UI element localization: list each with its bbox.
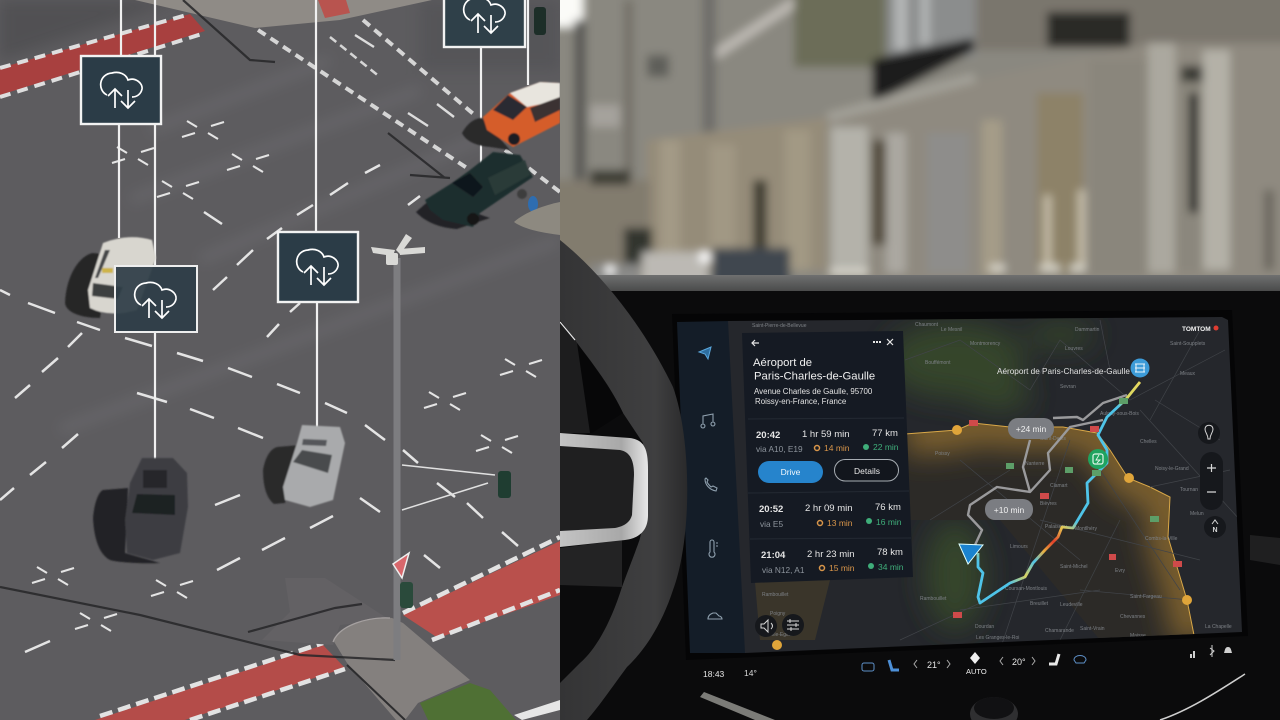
map place labels: Nanterre [1025,461,1045,467]
map place labels: La Chapelle [1205,624,1232,630]
route 1: 1 hr 59 min [802,429,850,440]
map place labels: Coursan-Montlouis [1005,586,1047,592]
clock: 18:43 [703,669,725,679]
route 1 [756,428,899,454]
lamp pole [394,258,400,660]
car: taxi [65,237,156,318]
map place labels: Chelles [1140,439,1157,445]
auto label: AUTO [966,667,987,676]
map place labels: Chaumont [915,322,939,328]
map place labels: Saint-Fargeau [1130,594,1162,600]
destination label: Aéroport de Paris-Charles-de-Gaulle [997,367,1130,376]
screen bezel [672,310,1248,660]
passenger temperature: 20° [1012,657,1026,667]
route pill +10 [985,499,1033,520]
map place labels: Chamarande [1045,628,1074,634]
route 2: 2 hr 09 min [805,503,853,514]
screen sidebar [677,321,746,653]
data box 3 [278,232,358,302]
chevrons right [1000,657,1035,665]
heat region [900,420,1200,645]
map place labels: Noisy-le-Grand [1155,466,1189,472]
map place labels: Saint-Michel [1060,564,1088,570]
climate bar [703,645,1232,679]
route 1: 22 min [873,442,899,452]
driver temperature: 21° [927,660,941,670]
blurred building background [540,0,1280,295]
asphalt tonal bands [2,2,141,52]
destination pin [1130,358,1150,378]
route 2: via E5 [760,519,783,529]
data box 1 [81,56,161,124]
center console knob [970,697,1018,720]
map place labels: Sevran [1060,384,1076,390]
car: dark jeep [93,458,188,563]
lower heat sliver [755,580,830,640]
hub highlight line [560,322,575,340]
map control: north [1204,516,1226,538]
details button [834,460,898,481]
route 2 [759,502,902,529]
route 3: 78 km [877,547,903,558]
sidewalk top right [514,202,560,235]
details button: Details [854,466,880,476]
white connector lines [119,0,528,460]
map place labels: Le Mesnil [941,327,962,333]
steering spoke bezel [560,433,648,547]
sidebar icon: phone [705,478,717,491]
destination address: Roissy-en-France, France [755,397,847,406]
alternative routes [968,395,1127,545]
chevrons left [914,660,950,668]
map place labels [752,322,1232,641]
green terrain [885,322,1095,630]
sidebar icon: thermometer [709,540,718,557]
map control: report [1198,422,1220,444]
map place labels: Saint-Pierre-de-Bellevue [752,323,807,329]
top sidewalk [135,0,432,28]
route 1: 20:42 [756,430,780,441]
route 1: via A10, E19 [756,444,803,454]
grass patch [420,683,516,720]
panel dividers [748,418,911,539]
map control: sound [755,615,777,637]
charge stops [772,425,1192,650]
route 2: 13 min [827,518,853,528]
vehicle position arrow [959,544,983,564]
sidebar icon: car [708,613,722,619]
map place labels: Saint-Denis [1040,436,1066,442]
map place labels: Montmorency [970,341,1001,347]
map place labels: Maisse [1130,633,1146,639]
bottom-right white line [514,700,560,720]
map place labels: Clamart [1050,483,1068,489]
route 3: 15 min [829,563,855,573]
route 3: 34 min [878,562,904,572]
heat boundary line [905,423,1195,640]
blue sign [528,196,538,212]
map place labels: Poissy [935,451,950,457]
route 2: 20:52 [759,504,783,515]
lamp shadows [0,0,450,660]
dashboard body [560,291,1280,720]
crossing marks [32,121,542,631]
map place labels: Tournan [1180,487,1198,493]
map place labels: Montlhéry [1075,526,1097,532]
route pill +24 [1008,418,1054,439]
route 1: 77 km [872,428,898,439]
outside temperature: 14° [744,668,757,678]
route pill +24: +24 min [1016,424,1047,434]
map place labels: Meaux [1180,371,1196,377]
asphalt road surface [0,0,560,720]
road arrows [355,35,454,126]
road network [800,320,1240,650]
lower-right red bike lane [403,537,560,640]
right photo: car interior [540,0,1280,720]
map base [720,310,1250,660]
fan icon [970,652,980,664]
seat icon right [1049,654,1059,664]
rear defrost icon [862,663,874,671]
small arrows on road [330,37,380,77]
drive button [758,461,823,483]
map control: settings [782,614,804,636]
map place labels: Poigny [770,611,786,617]
right vent glint [1250,535,1280,565]
map place labels: Saint-Vrain [1080,626,1105,632]
destination title: Paris-Charles-de-Gaulle [754,370,875,382]
map place labels: Bièvres [1040,501,1057,507]
route 3: via N12, A1 [762,565,805,575]
seat icon left [889,660,899,670]
map place labels: Vieille-Eglise [765,632,794,638]
route 2: 16 min [876,517,902,527]
trim right [1160,674,1245,720]
green shields [1006,398,1159,522]
trim left [700,692,775,720]
route 3: 2 hr 23 min [807,549,855,560]
traffic light on pole [400,582,413,608]
map place labels: Louvres [1065,346,1083,352]
steering spoke center [560,446,634,531]
map place labels: Palaiseau [1045,524,1067,530]
car: silver [263,425,345,507]
front defrost icon [1074,656,1086,663]
destination address [754,387,873,406]
top red detail [318,0,350,18]
sidewalk island [333,617,470,720]
map place labels: Combs-la-Ville [1145,536,1178,542]
map place labels: Dourdan [975,624,994,630]
route 2: 76 km [875,502,901,513]
status icons [1190,645,1232,658]
top-right crosswalks [258,20,560,192]
map [720,310,1250,660]
map place labels: Chevannes [1120,614,1146,620]
data box 4 [444,0,525,47]
car: orange [462,82,560,150]
lane dashes [0,165,518,652]
map place labels: Dammartin [1075,327,1100,333]
top-left red bike lane [0,14,205,97]
map place labels: Bouffémont [925,360,951,366]
destination address: Avenue Charles de Gaulle, 95700 [754,387,873,396]
wheel rear detail [560,540,622,587]
sidebar icon: music [701,414,715,428]
traffic light right [498,471,511,498]
map place labels: Saint-Soupplets [1170,341,1206,347]
map place labels: Limours [1010,544,1028,550]
left inner wheel shadow [577,343,623,433]
left wheel hub [560,320,590,433]
data box 2 [115,266,197,332]
route 3 [761,547,904,575]
map place labels: Rambouillet [762,592,789,598]
map place labels: Melun [1190,511,1204,517]
destination title: Aéroport de [753,357,812,369]
route pill +10: +10 min [994,505,1025,515]
pavement corner and crosswalk apron [316,640,324,644]
drive button: Drive [781,467,801,477]
map control: zoom [1200,452,1223,510]
main route [978,382,1140,603]
charging pin [1088,449,1108,469]
highway shields [953,420,1182,618]
bottom red bike lane [95,643,345,720]
route 1: 14 min [824,443,850,453]
left photo: aerial intersection [0,0,560,720]
panel toolbar [752,339,893,346]
lamp head [371,234,425,265]
destination title [753,357,875,382]
sidebar icon: navigation [699,347,711,359]
map place labels: Les Granges-le-Roi [976,635,1019,641]
dashboard top edge [560,275,1280,291]
map control: north: N [1212,527,1218,534]
map place labels: Evry [1115,568,1126,574]
car: dark green [416,152,533,229]
traffic wires [402,465,495,510]
map place labels: Rambouillet [920,596,947,602]
steering wheel rim [560,240,687,720]
map place labels: Breuillet [1030,601,1049,607]
sign top-right traffic light [534,7,546,35]
route panel [742,331,913,583]
TomTom logo: TOMTOM [1182,326,1211,333]
map place labels: Aulnay-sous-Bois [1100,411,1139,417]
yield sign [393,553,409,578]
route 3: 21:04 [761,550,786,561]
map place labels: Leudeville [1060,602,1083,608]
